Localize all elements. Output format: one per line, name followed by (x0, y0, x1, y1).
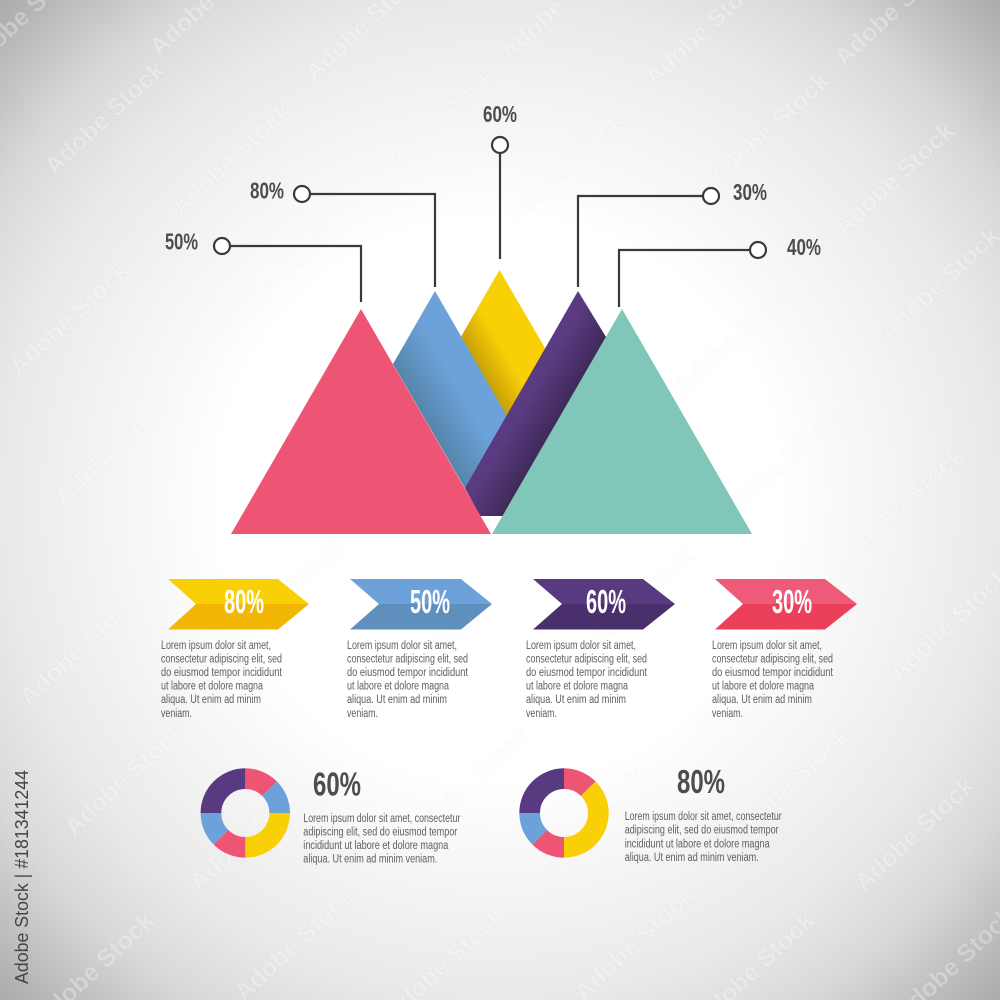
text block (303, 813, 460, 866)
callout: 50% (165, 228, 361, 302)
watermark: Adobe Stock (4, 257, 135, 381)
triangle: pink (231, 309, 491, 534)
text block: veniam. (526, 708, 557, 720)
watermark: Adobe Stock (499, 107, 630, 231)
arrow: purple 60%: 60% (586, 583, 626, 620)
text block: veniam. (347, 708, 378, 720)
callout: 80% (250, 178, 435, 287)
watermark: Adobe Stock (404, 722, 535, 846)
arrow: blue 50%: 50% (410, 583, 450, 620)
callout: 60% (483, 101, 517, 259)
watermark: Adobe Stock (59, 717, 190, 841)
text block: veniam. (712, 708, 743, 720)
text block (712, 640, 834, 720)
text block: adipiscing elit, sed do eiusmod tempor (625, 824, 779, 836)
arrow: yellow 80% (168, 579, 309, 630)
panel: left donut block (197, 764, 460, 866)
text block: aliqua. Ut enim ad minim (526, 694, 626, 706)
text block: Lorem ipsum dolor sit amet, (526, 640, 636, 652)
watermark: Adobe Stock (519, 762, 650, 886)
text block: ut labore et dolore magna (526, 680, 628, 692)
arrow: purple 60% (533, 579, 675, 630)
text block: consectetur adipiscing elit, sed (347, 654, 468, 666)
text block (347, 640, 469, 720)
callout: 30% (578, 179, 767, 287)
watermark: Adobe Stock (369, 62, 500, 186)
panel: red arrow block (712, 579, 857, 720)
text block: consectetur adipiscing elit, sed (526, 654, 647, 666)
text block: aliqua. Ut enim ad minim veniam. (303, 854, 437, 866)
triangle chart (231, 270, 752, 534)
watermark: Adobe Stock (669, 277, 800, 401)
heading: 60%: 60% (313, 766, 361, 802)
triangle: blue (393, 291, 530, 497)
panel: blue arrow block (347, 579, 492, 720)
text block: veniam. (161, 708, 192, 720)
text block (161, 640, 283, 720)
text block: do eiusmod tempor incididunt (712, 667, 834, 679)
text block: aliqua. Ut enim ad minim (347, 694, 447, 706)
text block (625, 811, 782, 864)
triangle: teal (492, 309, 752, 534)
text block: do eiusmod tempor incididunt (347, 667, 469, 679)
callout: 40%: 40% (787, 234, 821, 260)
text block: incididunt ut labore et dolore magna (303, 840, 449, 852)
text block: incididunt ut labore et dolore magna (625, 838, 770, 850)
watermark: Adobe Stock (679, 612, 810, 736)
watermark: Adobe Stock (166, 97, 297, 221)
arrow: red 30% (715, 579, 857, 630)
text block: aliqua. Ut enim ad minim veniam. (625, 852, 759, 864)
watermark: Adobe Stock (209, 217, 340, 341)
callout: 80%: 80% (250, 178, 284, 204)
watermark: Adobe Stock (184, 772, 315, 896)
watermark: Adobe Stock (14, 587, 145, 711)
text block: Lorem ipsum dolor sit amet, (347, 640, 457, 652)
panel: purple arrow block (526, 579, 675, 720)
text block: Lorem ipsum dolor sit amet, (161, 640, 271, 652)
donut chart: 60% (197, 764, 294, 862)
arrow: yellow 80%: 80% (224, 583, 264, 620)
watermark: Adobe Stock (569, 542, 700, 666)
arrow: blue 50% (350, 579, 492, 630)
text block: Lorem ipsum dolor sit amet, (712, 640, 822, 652)
watermark: Adobe Stock (359, 597, 490, 721)
callout: 40% (619, 234, 821, 307)
text block: ut labore et dolore magna (347, 680, 449, 692)
watermark: Adobe Stock (39, 56, 170, 180)
triangle: yellow (440, 270, 545, 430)
text block: ut labore et dolore magna (712, 680, 814, 692)
text block: consectetur adipiscing elit, sed (712, 654, 833, 666)
vertical stock credit: Adobe Stock | #181341244 (12, 770, 32, 984)
callout: 30%: 30% (733, 179, 767, 205)
text block: Lorem ipsum dolor sit amet, consectetur (625, 811, 782, 823)
text block: do eiusmod tempor incididunt (161, 667, 283, 679)
panel: yellow arrow block (161, 579, 309, 720)
text block (526, 640, 648, 720)
callout: 50%: 50% (165, 228, 198, 254)
text block: ut labore et dolore magna (161, 680, 263, 692)
donut chart: 80% (515, 764, 613, 862)
watermark: Adobe Stock (714, 402, 845, 526)
text block: aliqua. Ut enim ad minim (161, 694, 261, 706)
heading: 80%: 80% (677, 763, 725, 800)
arrow: red 30%: 30% (772, 583, 812, 620)
callout: 60%: 60% (483, 101, 517, 127)
watermark: Adobe Stock (49, 387, 180, 511)
text block: aliqua. Ut enim ad minim (712, 694, 812, 706)
text block: do eiusmod tempor incididunt (526, 667, 648, 679)
text block: adipiscing elit, sed do eiusmod tempor (303, 826, 457, 838)
watermark: Adobe Stock (724, 722, 855, 846)
watermark: Adobe Stock (704, 67, 835, 191)
panel: right donut block (515, 763, 782, 864)
triangle: purple (465, 291, 606, 516)
watermark: Adobe Stock (839, 442, 970, 566)
text block: consectetur adipiscing elit, sed (161, 654, 282, 666)
watermark: Adobe Stock (849, 772, 980, 896)
text block: Lorem ipsum dolor sit amet, consectetur (303, 813, 460, 825)
watermark: Adobe Stock (219, 532, 350, 656)
watermark: Adobe Stock (829, 117, 960, 241)
